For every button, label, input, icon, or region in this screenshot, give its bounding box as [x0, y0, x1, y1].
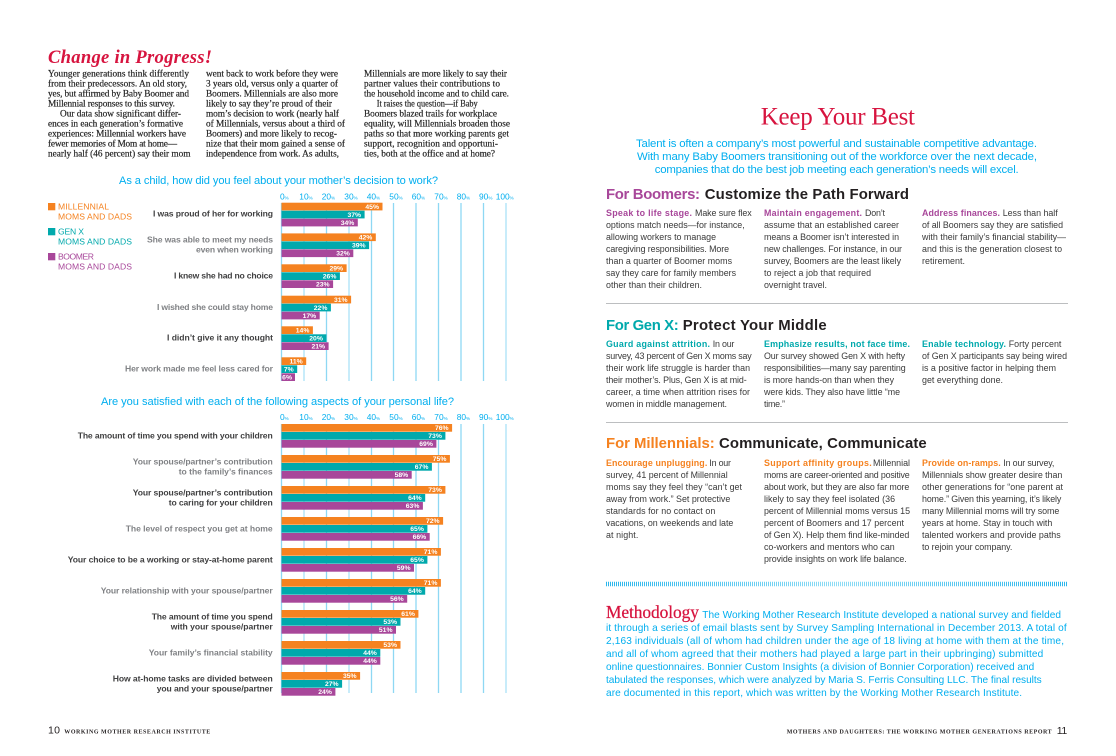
tip: guard against attrition: [605, 339, 752, 409]
tip: address finances: with their family’s financial stability—: [921, 232, 1066, 242]
intro paragraph: With many Baby Boomers transitioning out of the workforce over the next decade,: [637, 151, 1037, 163]
tip: provide on-ramps: many Millennial moms will try some: [922, 506, 1059, 516]
tip: speak to life stage: options match needs—for instance,: [606, 220, 745, 230]
text block: Methodology: The Working Mother Research Institute developed a national survey and fielded: [702, 610, 1061, 621]
row: I was proud of her for working: I was proud of her for working: [153, 209, 273, 219]
row: partner contribution to finances: to the family’s finances: [179, 467, 273, 477]
row: I knew she had no choice: I knew she had no choice: [174, 271, 273, 281]
text block: Methodology: tabulated the responses, which were analyzed by Maria S. Ferris Consulting LLC. The final results: [606, 675, 1042, 686]
row: at-home tasks: you and your spouse/partner: [157, 684, 273, 694]
axis labels: 90%: [479, 412, 492, 422]
tip: maintain engagement: Maintain engagement.: [764, 208, 862, 218]
text block: intro article: experiences: Millennial workers have: [48, 130, 186, 140]
title: Change in Progress: Change in Progress!: [48, 47, 212, 68]
axis labels: 20%: [322, 412, 335, 422]
section: For Boomers: [606, 187, 1066, 290]
row: time with partner: 51%: [379, 627, 392, 634]
axis labels: 100%: [496, 412, 514, 422]
tip: encourage unplugging: vacations, on weekends and late: [606, 518, 733, 528]
text block: Methodology: and all of whom agreed that their mothers had played a large part in their upbringing) submitted: [606, 649, 1043, 660]
text block: intro article: independence from work. As adults,: [206, 148, 339, 160]
row: I was proud of her for working: 45%: [365, 204, 379, 211]
row: partner contribution to caring for children: [133, 486, 445, 510]
tip: support affinity groups: percent of Millennial moms versus 15: [764, 506, 910, 516]
text block: Methodology: are documented in this report, which was written by the Working Mother Research Institute.: [606, 688, 1022, 699]
tip: maintain engagement: Don’t: [865, 208, 886, 218]
row: Her work made me feel less cared for: 11%: [289, 358, 303, 365]
tip: emphasize results: [763, 339, 910, 409]
legend item: millennial: MILLENNIAL: [58, 202, 109, 212]
text block: intro article: went back to work before they were: [206, 68, 338, 80]
text block: intro article: from their predecessors. An old story,: [48, 78, 187, 90]
section heading: For Gen X:: [606, 318, 679, 334]
section heading: [606, 436, 927, 452]
row: She was able to meet my needs: even when working: [196, 245, 273, 255]
axis labels: 90%: [479, 191, 492, 201]
tip: address finances: retirement.: [922, 256, 965, 266]
row: working or stay-at-home choice: 59%: [397, 565, 410, 572]
row: I wished she could stay home: I wished she could stay home: [157, 302, 273, 312]
tip: enable technology: [922, 339, 1067, 385]
footer: left page: 10: [48, 724, 60, 736]
row: respect at home: 65%: [410, 526, 424, 533]
tip: emphasize results: were kids. They also have little “me: [763, 387, 900, 397]
row: financial stability: 53%: [383, 642, 397, 649]
row: working or stay-at-home choice: 71%: [424, 549, 437, 556]
tip: encourage unplugging: [606, 458, 743, 540]
tip: guard against attrition: their mother’s. Plus, Gen X is at mid-: [606, 375, 747, 385]
tip: guard against attrition: survey, 43 percent of Gen X moms say: [606, 351, 752, 361]
row: I was proud of her for working: 37%: [347, 212, 361, 219]
text block: intro article: yes, but affirmed by Baby Boomer and: [48, 88, 189, 100]
tip: support affinity groups: moms are career-oriented and positive: [764, 470, 910, 480]
row: time with partner: [152, 610, 418, 634]
text block: Methodology: it through a series of email blasts sent by Survey Sampling International in December 2013. A total of: [606, 623, 1067, 634]
tip: maintain engagement: new challenges. For instance, in our: [764, 244, 902, 254]
tip: maintain engagement: assume that an established career: [764, 220, 899, 230]
tip: guard against attrition: their work life struggle is harder than: [606, 363, 750, 373]
row: I was proud of her for working: [153, 203, 382, 227]
row: Her work made me feel less cared for: 6%: [282, 374, 292, 381]
text block: intro article: Millennial responses to this survey.: [48, 100, 175, 110]
tip: guard against attrition: Guard against attrition.: [606, 339, 710, 349]
row: She was able to meet my needs: 42%: [359, 234, 372, 241]
tip: encourage unplugging: standards for no contact on: [606, 506, 715, 516]
tip: address finances: [921, 208, 1066, 266]
section heading: [606, 187, 909, 203]
text block: intro article: fewer memories of Mom at home—: [48, 138, 178, 150]
text block: intro article: ences in each generation’s formative: [48, 118, 183, 130]
legend item: boomer: MOMS AND DADS: [58, 262, 132, 272]
row: Her work made me feel less cared for: 7%: [284, 366, 294, 373]
tip: support affinity groups: percent of Boomers and 17 percent: [764, 518, 905, 528]
row: time with partner: The amount of time you spend: [152, 612, 273, 622]
section heading: For Boomers:: [606, 187, 700, 203]
row: She was able to meet my needs: 39%: [352, 242, 366, 249]
section heading: Protect Your Middle: [683, 318, 827, 334]
row: I didn't give it any thought: 20%: [309, 335, 323, 342]
axis labels: 80%: [457, 412, 470, 422]
row: She was able to meet my needs: 32%: [336, 250, 350, 257]
intro paragraph: Talent is often a company’s most powerful and sustainable competitive advantage.: [636, 138, 1037, 150]
tip: maintain engagement: overnight travel.: [764, 280, 827, 290]
tip: speak to life stage: than a quarter of Boomer moms: [606, 256, 733, 266]
text block: intro article: equality, will Millennials broaden those: [364, 120, 510, 130]
row: time with children: 73%: [428, 433, 442, 440]
chart heading: personal life satisfaction: Are you satisfied with each of the following aspects of your personal life?: [101, 396, 454, 408]
row: time with partner: 53%: [383, 619, 397, 626]
axis labels: 40%: [367, 191, 380, 201]
row: relationship with partner: 64%: [408, 588, 422, 595]
tip: encourage unplugging: In our: [709, 458, 731, 468]
row: respect at home: 72%: [426, 518, 440, 525]
tip: provide on-ramps: home.” Given this yearning, it’s likely: [922, 494, 1062, 504]
axis labels: 10%: [299, 412, 313, 422]
row: partner contribution to caring for children: 73%: [428, 487, 442, 494]
row: I didn't give it any thought: 21%: [311, 343, 325, 350]
tip: enable technology: is a positive factor in helping them: [922, 363, 1056, 373]
axis labels: 60%: [412, 191, 425, 201]
tip: speak to life stage: Make sure flex: [695, 208, 752, 218]
text block: intro article: mom’s decision to work (nearly half: [206, 108, 340, 120]
tip: speak to life stage: allowing workers to manage: [606, 232, 716, 242]
chart heading: mother's decision to work: As a child, how did you feel about your mother’s decision to work?: [119, 175, 438, 187]
tip: guard against attrition: career, a time when attrition rises for: [606, 387, 750, 397]
row: working or stay-at-home choice: Your choice to be a working or stay-at-home parent: [68, 555, 273, 565]
text block: intro article: Our data show significant differ-: [60, 108, 181, 120]
section heading: For Millennials:: [606, 436, 715, 452]
row: working or stay-at-home choice: [68, 548, 441, 572]
tip: guard against attrition: In our: [713, 339, 734, 349]
tip: address finances: Address finances.: [922, 208, 1000, 218]
text block: intro article: [48, 68, 510, 160]
footer: right page: MOTHERS AND DAUGHTERS: THE WORKING MOTHER GENERATIONS REPORT: [787, 729, 1052, 735]
row: financial stability: 44%: [363, 658, 377, 665]
tip: provide on-ramps: years at home. Stay in touch with: [922, 518, 1052, 528]
tip: guard against attrition: women in middle management.: [605, 399, 727, 409]
text block: Methodology: online questionnaires. Bonnier Custom Insights (a division of Bonnier Corporation) received and: [606, 662, 1034, 673]
tip: encourage unplugging: moms say they feel they “can’t get: [606, 482, 743, 492]
section heading: Customize the Path Forward: [705, 187, 909, 203]
row: financial stability: [149, 641, 400, 665]
row: Her work made me feel less cared for: [125, 357, 306, 381]
axis labels: 50%: [389, 191, 403, 201]
axis labels: 60%: [412, 412, 425, 422]
tip: provide on-ramps: Millennials show greater desire than: [922, 470, 1062, 480]
row: time with children: 69%: [419, 441, 433, 448]
axis labels: 30%: [344, 191, 358, 201]
tip: emphasize results: responsibilities—many say parenting: [764, 363, 906, 373]
text block: intro article: the household income and to child care.: [364, 90, 509, 100]
row: relationship with partner: [101, 579, 441, 603]
tip: encourage unplugging: survey, 41 percent of Millennial: [606, 470, 728, 480]
tip: support affinity groups: provide insights on work life balance.: [764, 554, 907, 564]
axis labels: 100%: [496, 191, 514, 201]
axis labels: 30%: [344, 412, 358, 422]
text block: intro article: It raises the question—if Baby: [377, 98, 478, 110]
tip: provide on-ramps: other generations for “one parent at: [922, 482, 1064, 492]
row: at-home tasks: How at-home tasks are divided between: [113, 674, 273, 684]
axis labels: 10%: [299, 191, 313, 201]
row: I wished she could stay home: 17%: [303, 313, 316, 320]
row: time with children: [78, 424, 452, 448]
text block: intro article: Younger generations think differently: [48, 68, 189, 80]
tip: emphasize results: is more hands-on than when they: [764, 375, 895, 385]
row: partner contribution to finances: Your spouse/partner’s contribution: [133, 457, 273, 467]
tip: support affinity groups: about work, but they are also far more: [764, 482, 909, 492]
footer: right page: [787, 725, 1067, 737]
tip: provide on-ramps: talented workers and provide paths: [922, 530, 1061, 540]
tip: emphasize results: Our survey showed Gen X with hefty: [764, 351, 906, 361]
row: I knew she had no choice: 26%: [323, 273, 336, 280]
text block: Methodology: Methodology: [606, 602, 699, 622]
axis labels: 50%: [389, 412, 403, 422]
row: at-home tasks: 24%: [318, 689, 332, 696]
axis labels: 70%: [434, 191, 448, 201]
intro paragraph: companies that do the best job meeting each generation’s needs will excel.: [655, 164, 1019, 176]
text block: intro article: likely to say they’re proud of their: [206, 98, 333, 110]
tip: speak to life stage: caregiving responsibilities. More: [606, 244, 729, 254]
text block: intro article: of Millennials, versus about a third of: [206, 118, 346, 130]
row: Her work made me feel less cared for: Her work made me feel less cared for: [125, 364, 274, 374]
tip: enable technology: Forty percent: [1009, 339, 1062, 349]
tip: support affinity groups: [764, 458, 910, 564]
row: time with children: The amount of time you spend with your children: [78, 431, 273, 441]
row: I knew she had no choice: 29%: [329, 265, 343, 272]
row: partner contribution to finances: 67%: [415, 464, 428, 471]
row: I didn't give it any thought: I didn’t give it any thought: [167, 333, 273, 343]
footer: right page: 11: [1057, 725, 1067, 737]
text block: intro article: Boomers) and more likely to recog-: [206, 128, 337, 140]
tip: maintain engagement: survey, Boomers are the least likely: [764, 256, 902, 266]
text block: intro article: Boomers. Millennials are also more: [206, 90, 338, 100]
axis labels: [280, 191, 514, 201]
legend item: boomer: BOOMER: [58, 252, 94, 262]
row: relationship with partner: Your relationship with your spouse/partner: [101, 586, 273, 596]
footer: left page: WORKING MOTHER RESEARCH INSTITUTE: [64, 729, 210, 735]
tip: provide on-ramps: to rejoin your company.: [922, 542, 1012, 552]
row: relationship with partner: 56%: [390, 596, 404, 603]
legend item: gen x: MOMS AND DADS: [58, 236, 132, 246]
tip: encourage unplugging: away from work.” Set protective: [606, 494, 730, 504]
tip: encourage unplugging: Encourage unplugging.: [606, 458, 707, 468]
tip: address finances: Less than half: [1003, 208, 1058, 218]
tip: maintain engagement: [764, 208, 902, 290]
text block: intro article: support, recognition and opportuni-: [364, 140, 498, 150]
axis labels: [280, 412, 514, 422]
bar chart: mother's decision to work: [125, 191, 514, 381]
tip: provide on-ramps: Provide on-ramps.: [922, 458, 1001, 468]
tip: provide on-ramps: [922, 458, 1064, 552]
row: time with partner: 61%: [401, 611, 415, 618]
tip: speak to life stage: say they care for family members: [606, 268, 737, 278]
section heading: [606, 318, 827, 334]
text block: intro article: Millennials are more likely to say their: [364, 70, 508, 80]
row: partner contribution to finances: [133, 455, 450, 479]
row: I wished she could stay home: [157, 296, 351, 320]
legend item: gen x: [48, 226, 132, 246]
tip: address finances: and this is the generation closest to: [922, 244, 1062, 254]
footer: left page: [48, 724, 210, 736]
tip: support affinity groups: likely to say they feel isolated (36: [764, 494, 895, 504]
section heading: Communicate, Communicate: [719, 436, 927, 452]
tip: support affinity groups: of Gen X). Help them find like-minded: [764, 530, 909, 540]
legend item: millennial: MOMS AND DADS: [58, 212, 132, 222]
section: For Millennials: [606, 436, 1064, 564]
row: She was able to meet my needs: [147, 233, 376, 258]
legend: [48, 202, 132, 272]
row: I didn't give it any thought: 14%: [296, 327, 309, 334]
row: She was able to meet my needs: She was able to meet my needs: [147, 235, 273, 245]
tip: enable technology: Enable technology.: [922, 339, 1006, 349]
tip: support affinity groups: Millennial: [873, 458, 910, 468]
text block: intro article: paths so that more working parents get: [364, 130, 509, 140]
tip: speak to life stage: other than their children.: [606, 280, 702, 290]
title: Keep Your Best: Keep Your Best: [761, 103, 915, 130]
tip: maintain engagement: to reject a job that required: [764, 268, 871, 278]
row: partner contribution to caring for children: 63%: [406, 503, 419, 510]
legend item: boomer: [48, 252, 132, 272]
row: I wished she could stay home: 22%: [314, 305, 327, 312]
row: respect at home: 66%: [413, 534, 426, 541]
row: relationship with partner: 71%: [424, 580, 437, 587]
row: at-home tasks: 27%: [325, 681, 339, 688]
section: For Gen X: [605, 318, 1067, 409]
row: respect at home: The level of respect you get at home: [126, 524, 273, 534]
row: at-home tasks: 35%: [343, 673, 357, 680]
row: I knew she had no choice: [174, 264, 347, 288]
axis labels: 0%: [280, 412, 289, 422]
text block: intro article: nize that their mom gained a sense of: [206, 138, 346, 150]
tip: enable technology: of Gen X participants say being wired: [922, 351, 1067, 361]
text block: intro article: nearly half (46 percent) say their mom: [48, 148, 191, 160]
tip: emphasize results: time.”: [764, 399, 785, 409]
row: financial stability: Your family’s financial stability: [149, 648, 273, 658]
axis labels: 0%: [280, 191, 289, 201]
axis labels: 20%: [322, 191, 335, 201]
tip: emphasize results: Emphasize results, not face time.: [764, 339, 910, 349]
row: partner contribution to finances: 58%: [395, 472, 408, 479]
intro paragraph: [636, 138, 1037, 176]
tip: enable technology: get everything done.: [922, 375, 1003, 385]
row: I didn't give it any thought: [167, 326, 329, 350]
row: I knew she had no choice: 23%: [316, 281, 330, 288]
tip: maintain engagement: means a Boomer isn’t interested in: [764, 232, 899, 242]
legend item: gen x: GEN X: [58, 226, 84, 236]
row: respect at home: [126, 517, 443, 541]
tip: speak to life stage: Speak to life stage.: [606, 208, 692, 218]
row: partner contribution to caring for children: to caring for your children: [169, 498, 273, 508]
row: partner contribution to finances: 75%: [433, 456, 446, 463]
text block: intro article: Boomers blazed trails for workplace: [364, 108, 497, 120]
tip: support affinity groups: co-workers and mentors who can: [764, 542, 895, 552]
tip: speak to life stage: [606, 208, 752, 290]
text block: intro article: ties, both at the office and at home?: [364, 148, 495, 160]
tip: address finances: of all Boomers say they are satisfied: [922, 220, 1063, 230]
row: working or stay-at-home choice: 65%: [410, 557, 424, 564]
text block: Methodology: [606, 602, 1067, 699]
row: financial stability: 44%: [363, 650, 377, 657]
row: time with partner: with your spouse/partner: [170, 622, 273, 632]
text block: intro article: partner values their contributions to: [364, 80, 500, 90]
text block: intro article: 3 years old, versus only a quarter of: [206, 78, 339, 90]
row: I wished she could stay home: 31%: [334, 297, 348, 304]
row: partner contribution to caring for children: Your spouse/partner’s contribution: [133, 488, 273, 498]
row: partner contribution to caring for children: 64%: [408, 495, 422, 502]
legend item: millennial: [48, 202, 132, 222]
row: time with children: 76%: [435, 425, 449, 432]
row: at-home tasks: [113, 672, 360, 696]
axis labels: 80%: [457, 191, 470, 201]
row: I was proud of her for working: 34%: [341, 220, 354, 227]
text block: Methodology: 2,163 individuals (all of whom had children under the age of 18 living at home with them at the time,: [606, 636, 1064, 647]
bar chart: personal life satisfaction: [68, 412, 514, 696]
axis labels: 40%: [367, 412, 380, 422]
tip: support affinity groups: Support affinity groups.: [764, 458, 872, 468]
tip: encourage unplugging: at night.: [606, 530, 638, 540]
tip: provide on-ramps: In our survey,: [1003, 458, 1054, 468]
axis labels: 70%: [434, 412, 448, 422]
